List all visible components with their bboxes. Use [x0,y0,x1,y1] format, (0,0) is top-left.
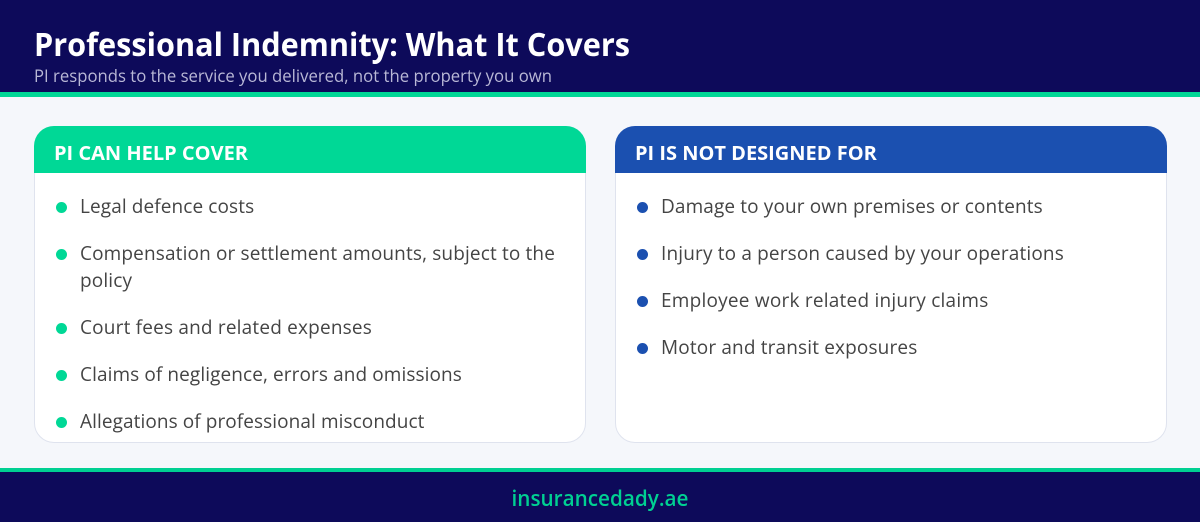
bullet dot [56,370,67,381]
list item: Employee work related injury claims [661,287,988,313]
panel: PI is not designed for [615,126,1167,443]
title: Professional Indemnity: What It Covers [34,23,630,66]
list item: Compensation or settlement amounts, subject to the policy [80,240,555,293]
footer band [0,468,1200,522]
panel heading: not designed for [615,126,1167,173]
panel heading: not designed for: PI IS NOT DESIGNED FOR [635,139,877,166]
bullet dot [56,202,67,213]
list item: Claims of negligence, errors and omissions [80,361,462,387]
bullet dot [637,202,648,213]
panel heading: can help cover: PI CAN HELP COVER [54,139,248,166]
list item: Motor and transit exposures [661,334,917,360]
bullet dot [56,249,67,260]
list item: Injury to a person caused by your operations [661,240,1064,266]
footer website: insurancedady.ae [512,483,688,513]
panel: PI can help cover [34,126,586,443]
list item: Court fees and related expenses [80,314,372,340]
bullet dot [637,249,648,260]
list item: Damage to your own premises or contents [661,193,1043,219]
list item: Allegations of professional misconduct [80,408,425,434]
bullet dot [56,417,67,428]
bullet dot [56,323,67,334]
list item: Legal defence costs [80,193,254,219]
subtitle: PI responds to the service you delivered, not the property you own [34,64,552,87]
panel heading: can help cover [34,126,586,173]
bullet dot [637,296,648,307]
header band [0,0,1200,97]
bullet dot [637,343,648,354]
